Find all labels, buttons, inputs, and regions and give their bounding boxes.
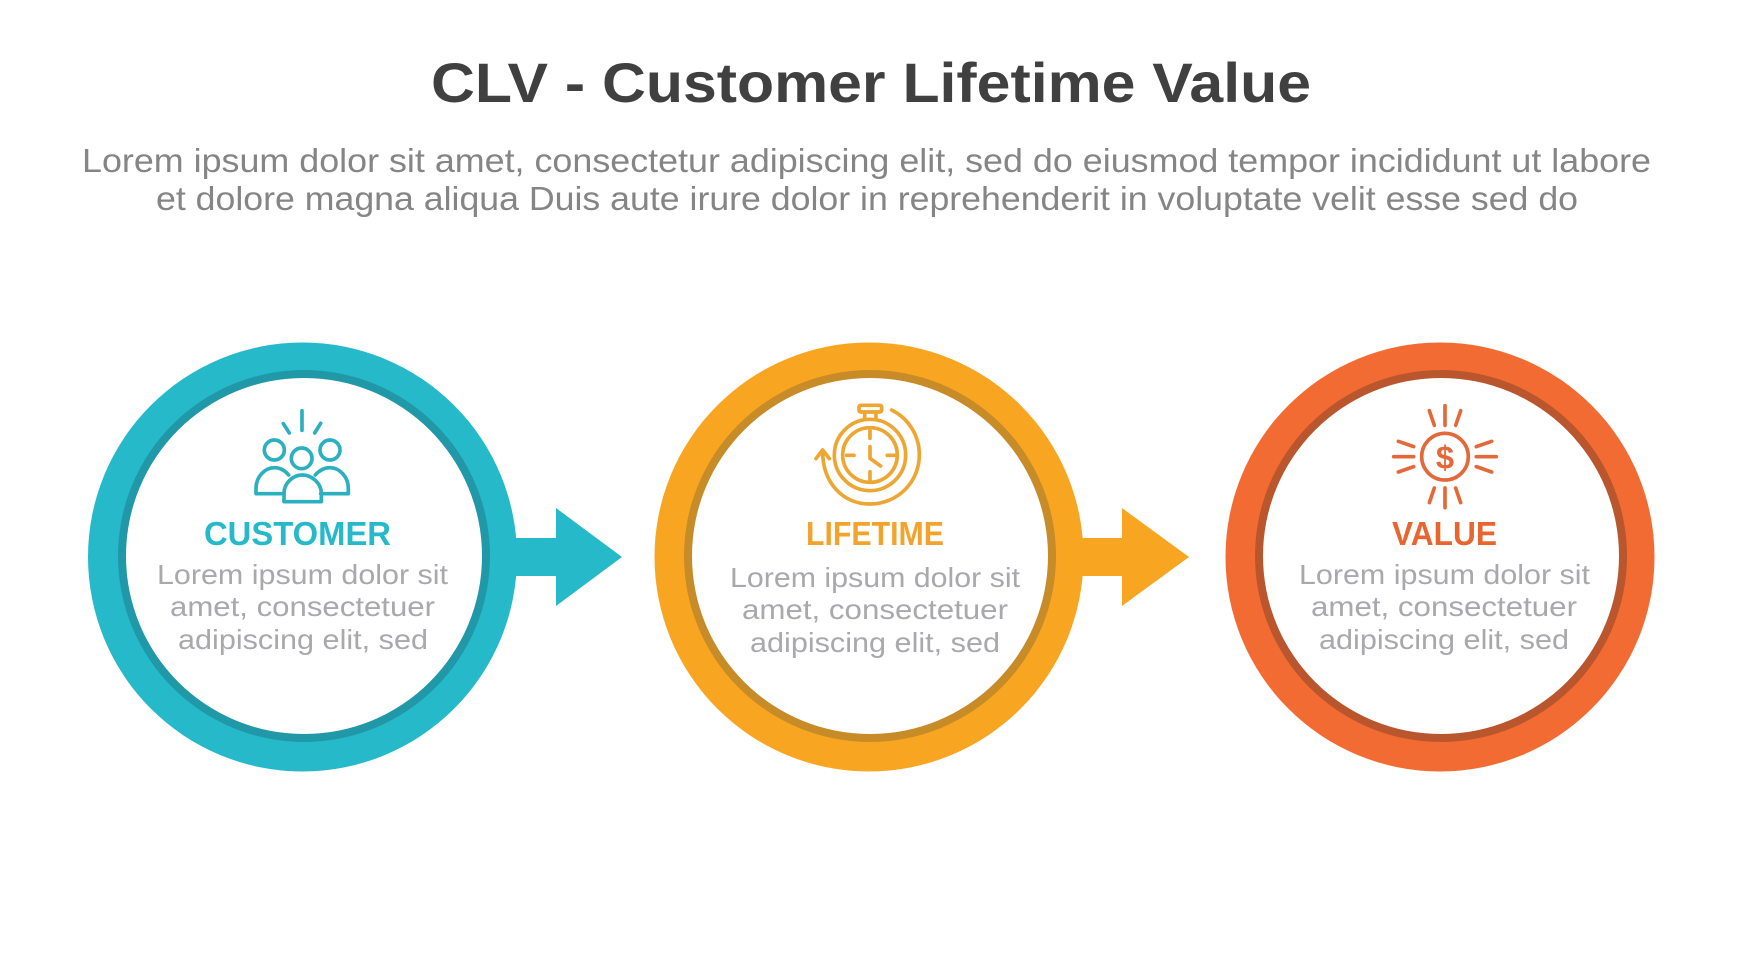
icon: customer group — [256, 411, 348, 502]
arrow: lifetime to value — [1075, 508, 1189, 606]
icon: stopwatch — [816, 405, 919, 504]
text: lifetime body — [730, 562, 1020, 658]
icon: dollar sun: $ — [1436, 439, 1454, 476]
heading: lifetime: LIFETIME — [806, 515, 944, 552]
panel: value — [1226, 342, 1654, 772]
arrow: customer to lifetime — [510, 508, 622, 606]
panel: lifetime — [654, 342, 1189, 772]
text: lifetime body: Lorem ipsum dolor sit — [730, 562, 1020, 593]
text: customer body: amet, consectetuer — [170, 591, 435, 622]
ring: lifetime — [654, 342, 1084, 772]
text: lifetime body: amet, consectetuer — [742, 594, 1008, 625]
text: value body: Lorem ipsum dolor sit — [1299, 559, 1590, 590]
text: customer body — [157, 559, 448, 655]
text: value body — [1299, 559, 1590, 655]
title: CLV - Customer Lifetime Value — [431, 51, 1311, 114]
text: lifetime body: adipiscing elit, sed — [750, 627, 1000, 658]
text: customer body: Lorem ipsum dolor sit — [157, 559, 448, 590]
heading: customer: CUSTOMER — [204, 515, 391, 552]
ring: value — [1226, 342, 1654, 772]
subtitle text block: et dolore magna aliqua Duis aute irure dolor in reprehenderit in voluptate velit esse sed do — [156, 180, 1578, 217]
heading: value: VALUE — [1392, 515, 1497, 552]
subtitle text block — [82, 142, 1651, 217]
subtitle text block: Lorem ipsum dolor sit amet, consectetur adipiscing elit, sed do eiusmod tempor incididunt ut labore — [82, 142, 1651, 179]
text: value body: amet, consectetuer — [1311, 591, 1577, 622]
text: value body: adipiscing elit, sed — [1319, 624, 1569, 655]
text: customer body: adipiscing elit, sed — [178, 624, 428, 655]
panel: customer — [88, 342, 622, 772]
ring: customer — [88, 342, 517, 772]
icon: dollar sun — [1394, 406, 1496, 508]
